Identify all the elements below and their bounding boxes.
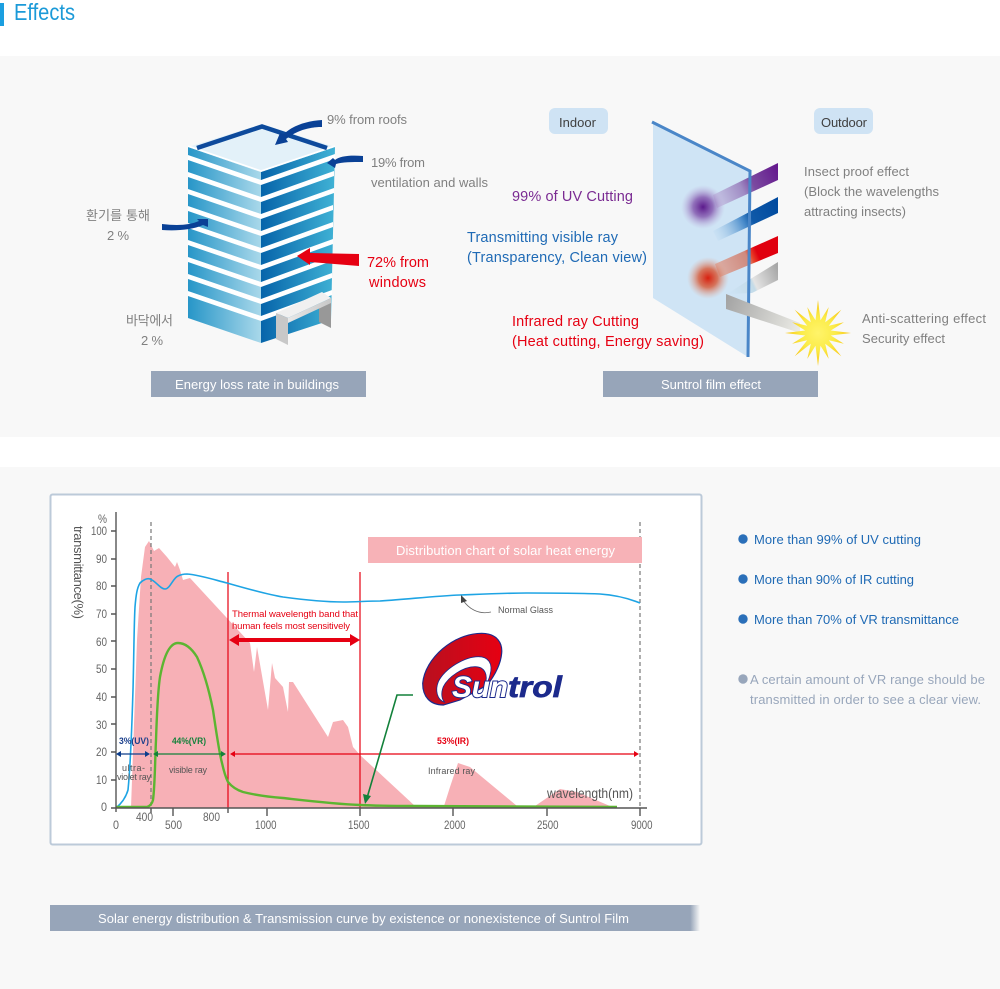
y axis labels: 50 — [96, 662, 107, 676]
y axis labels: 10 — [96, 773, 107, 787]
caption: solar energy distribution: Solar energy distribution & Transmission curve by existence or nonexistence of Suntrol Film — [98, 911, 629, 926]
label: floor Korean: 2 % — [141, 333, 163, 348]
x axis labels: 800 — [203, 810, 220, 824]
arrow: ventilation left — [162, 219, 208, 230]
solar energy area — [131, 541, 610, 808]
label: VR share: 44%(VR) — [172, 736, 206, 747]
label: floor Korean: 바닥에서 — [126, 313, 173, 328]
Suntrol transmission curve — [116, 643, 617, 807]
y axis labels: 30 — [96, 718, 107, 732]
x axis labels: 1500 — [348, 818, 370, 832]
y axis labels: 90 — [96, 552, 107, 566]
panel: Suntrol film effect — [467, 108, 986, 397]
icon: entrance canopy — [276, 292, 331, 345]
label: ventilation and walls: ventilation and walls — [371, 175, 488, 190]
arrow: VR range — [153, 751, 226, 757]
chart: solar energy and transmission — [50, 494, 702, 844]
note: VR range: transmitted in order to see a clear view. — [750, 692, 981, 707]
label: UV share: 3%(UV) — [119, 736, 149, 747]
label: infrared cutting: Infrared ray Cutting — [512, 314, 639, 330]
y axis labels: 80 — [96, 579, 107, 593]
logo: Suntrol — [423, 633, 563, 705]
y axis title: transmittance(%) — [71, 526, 86, 619]
y axis labels — [91, 512, 107, 814]
banner: distribution chart — [368, 537, 642, 563]
label: Indoor — [549, 108, 608, 134]
y axis labels: 60 — [96, 635, 107, 649]
panel: energy loss rate in buildings — [86, 112, 488, 397]
banner: distribution chart: Distribution chart of solar heat energy — [396, 543, 616, 558]
label: thermal band: Thermal wavelength band that — [232, 609, 358, 620]
x axis labels: 500 — [165, 818, 182, 832]
icon: yellow star burst — [785, 300, 851, 366]
y axis labels: % — [98, 512, 107, 526]
y axis labels: 40 — [96, 690, 107, 704]
icon: glass pane — [653, 122, 750, 357]
label: ultra-violet ray: ultra- — [122, 763, 145, 773]
caption: energy loss: Energy loss rate in buildings — [175, 377, 340, 392]
label: insect proof: Insect proof effect — [804, 164, 909, 179]
label: Outdoor: Outdoor — [821, 115, 868, 130]
bullet: UV: More than 99% of UV cutting — [754, 532, 921, 547]
icon: gray ray to star — [726, 294, 800, 333]
label: visible ray: visible ray — [169, 765, 208, 775]
bullet: IR: More than 90% of IR cutting — [754, 572, 914, 587]
label: roofs: 9% from roofs — [327, 112, 408, 127]
label: IR share: 53%(IR) — [437, 736, 469, 747]
icon: gray security ray — [727, 262, 778, 294]
label: ventilation and walls: 19% from — [371, 155, 425, 170]
caption: film effect: Suntrol film effect — [661, 377, 761, 392]
icon: blue visible ray — [713, 197, 778, 241]
label: windows: windows — [368, 275, 426, 291]
x axis labels: 1000 — [255, 818, 277, 832]
label: ultra-violet ray — [117, 763, 152, 782]
label: insect proof: attracting insects) — [804, 204, 906, 219]
label: visible ray — [467, 230, 647, 266]
label: infrared cutting — [512, 314, 704, 350]
label: Indoor: Indoor — [559, 115, 597, 130]
label: infrared cutting: (Heat cutting, Energy saving) — [512, 334, 704, 350]
label: insect proof: (Block the wavelengths — [804, 184, 940, 199]
callout: normal glass: Normal Glass — [498, 605, 554, 615]
note: VR range: A certain amount of VR range should be — [750, 672, 985, 687]
arrow: ventilation and walls — [327, 156, 363, 168]
axes — [111, 512, 647, 816]
label: windows — [367, 255, 429, 291]
label: insect proof — [804, 164, 940, 219]
label: thermal band — [232, 609, 358, 632]
arrow: roofs — [275, 120, 322, 145]
x axis title: wavelength(nm) — [546, 786, 633, 801]
label: ventilation Korean: 환기를 통해 — [86, 208, 150, 223]
x axis labels: 9000 — [631, 818, 653, 832]
y axis labels: 0 — [101, 800, 107, 814]
label: security: Security effect — [862, 331, 945, 346]
icon: isometric building — [188, 124, 335, 345]
label: security: Anti-scattering effect — [862, 311, 986, 326]
y axis labels: 100 — [91, 524, 107, 538]
arrow: windows — [297, 248, 359, 266]
label: ventilation Korean — [86, 208, 150, 243]
label: visible ray: (Transparency, Clean view) — [467, 250, 647, 266]
label: UV cutting: 99% of UV Cutting — [512, 189, 633, 205]
y axis labels: 20 — [96, 745, 107, 759]
arrow: UV range — [116, 751, 150, 757]
x axis labels — [113, 810, 653, 832]
callout: normal glass — [461, 595, 554, 615]
list: performance bullets — [738, 532, 959, 627]
label: ventilation and walls — [371, 155, 488, 190]
arrow: Suntrol curve pointer — [363, 695, 413, 804]
icon: red infrared ray — [687, 236, 778, 299]
y axis labels: 70 — [96, 607, 107, 621]
logo: Suntrol: trol — [508, 671, 563, 704]
normal glass curve — [116, 574, 640, 808]
caption: energy loss — [151, 371, 366, 397]
dashed boundaries — [151, 522, 640, 808]
thermal band lines — [228, 572, 360, 808]
label: Outdoor — [814, 108, 873, 134]
label: infrared ray: Infrared ray — [428, 766, 476, 776]
arrow: IR range — [230, 751, 639, 757]
x axis labels: 2000 — [444, 818, 466, 832]
caption: film effect — [603, 371, 818, 397]
icon: purple UV ray — [681, 163, 778, 229]
label: ultra-violet ray: violet ray — [117, 772, 152, 782]
x axis labels: 2500 — [537, 818, 559, 832]
logo: Suntrol: Sun — [452, 671, 508, 704]
label: floor Korean — [126, 313, 173, 348]
x axis labels: 0 — [113, 818, 119, 832]
bullet: VR: More than 70% of VR transmittance — [754, 612, 959, 627]
label: ventilation Korean: 2 % — [107, 228, 129, 243]
label: windows: 72% from — [367, 255, 429, 271]
label: thermal band: human feels most sensitively — [232, 621, 350, 632]
caption: solar energy distribution — [50, 905, 700, 931]
note: VR range — [738, 672, 985, 707]
glass edge — [652, 122, 750, 357]
label: visible ray: Transmitting visible ray — [467, 230, 619, 246]
arrow: thermal band — [229, 634, 360, 646]
label: security — [862, 311, 986, 346]
x axis labels: 400 — [136, 810, 153, 824]
